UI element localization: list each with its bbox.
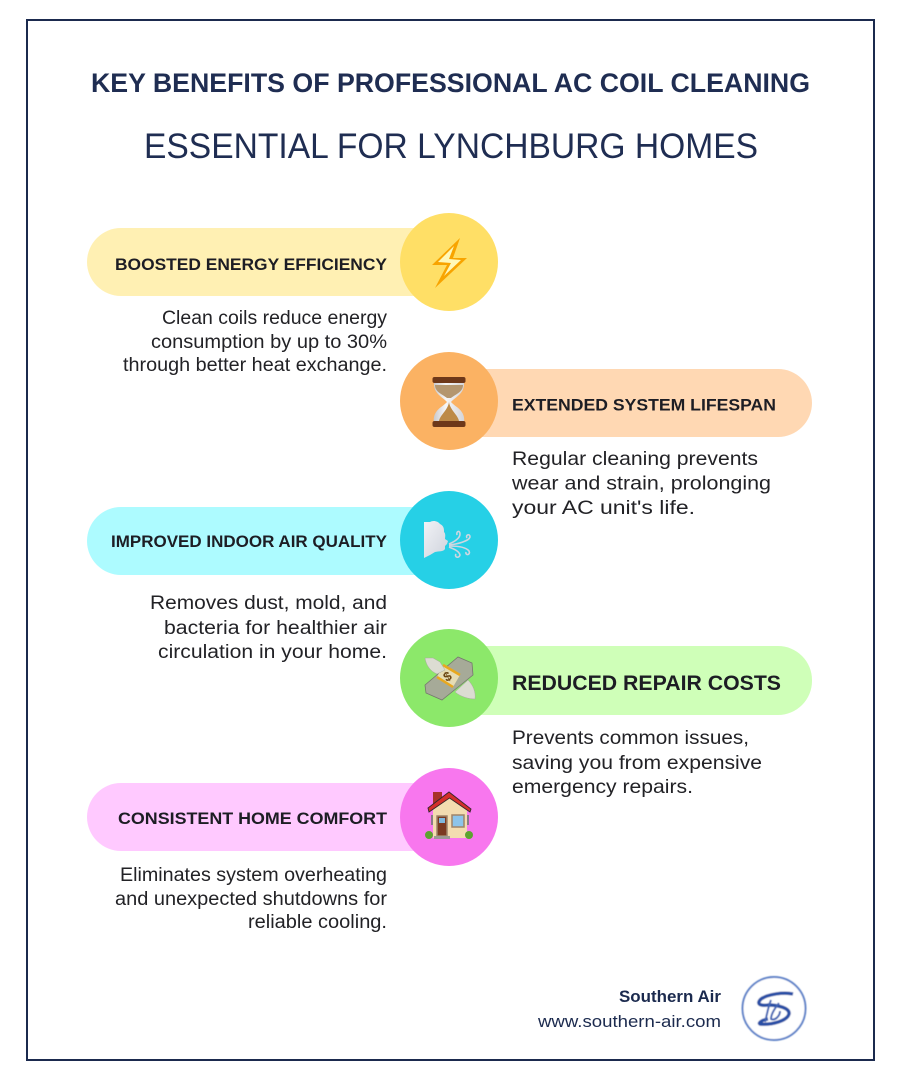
website: www.southern-air.com xyxy=(537,1013,721,1031)
description: saving you from expensive xyxy=(512,752,762,774)
description xyxy=(512,727,762,798)
description: emergency repairs. xyxy=(512,776,693,798)
description: consumption by up to 30% xyxy=(151,332,387,353)
icon: logo xyxy=(742,977,806,1040)
description: circulation in your home. xyxy=(158,642,387,663)
description xyxy=(511,448,771,519)
icon: money with wings: $ xyxy=(440,668,455,685)
description: wear and strain, prolonging xyxy=(511,472,771,494)
label pill xyxy=(442,646,812,715)
description: your AC unit's life. xyxy=(512,497,695,519)
heading: EXTENDED SYSTEM LIFESPAN xyxy=(512,396,776,414)
panel: improved indoor air quality xyxy=(87,491,498,663)
icon: hourglass xyxy=(432,377,466,427)
description xyxy=(150,593,388,663)
description xyxy=(123,308,388,376)
panel: extended system lifespan xyxy=(400,352,812,519)
heading: IMPROVED INDOOR AIR QUALITY xyxy=(111,533,387,551)
icon circle xyxy=(400,491,498,589)
icon: face blowing wind xyxy=(424,521,470,558)
label pill xyxy=(87,783,457,851)
icon: house xyxy=(425,792,473,839)
description xyxy=(115,865,388,933)
heading: CONSISTENT HOME COMFORT xyxy=(118,810,387,828)
description: Prevents common issues, xyxy=(512,727,749,749)
description: Clean coils reduce energy xyxy=(162,308,388,329)
label pill xyxy=(442,369,812,437)
description: and unexpected shutdowns for xyxy=(115,889,388,910)
footer: brand xyxy=(537,977,806,1040)
description: Removes dust, mold, and xyxy=(150,593,387,614)
description: reliable cooling. xyxy=(248,912,387,933)
icon: lightning bolt xyxy=(432,238,467,288)
icon circle xyxy=(400,213,498,311)
heading: BOOSTED ENERGY EFFICIENCY xyxy=(115,256,387,274)
description: bacteria for healthier air xyxy=(164,618,388,639)
icon circle xyxy=(400,629,498,727)
title: KEY BENEFITS OF PROFESSIONAL AC COIL CLEANING xyxy=(91,68,810,98)
panel: boosted energy efficiency xyxy=(87,213,498,376)
label pill xyxy=(87,228,457,296)
icon circle xyxy=(400,768,498,866)
icon: money with wings xyxy=(425,657,475,700)
panel: consistent home comfort xyxy=(87,768,498,933)
subtitle: ESSENTIAL FOR LYNCHBURG HOMES xyxy=(144,127,758,166)
panel: reduced repair costs xyxy=(400,629,812,798)
icon circle xyxy=(400,352,498,450)
description: through better heat exchange. xyxy=(123,355,387,376)
description: Eliminates system overheating xyxy=(120,865,387,886)
description: Regular cleaning prevents xyxy=(512,448,758,470)
brand name: Southern Air xyxy=(619,987,721,1006)
heading: REDUCED REPAIR COSTS xyxy=(512,671,781,695)
label pill xyxy=(87,507,457,575)
